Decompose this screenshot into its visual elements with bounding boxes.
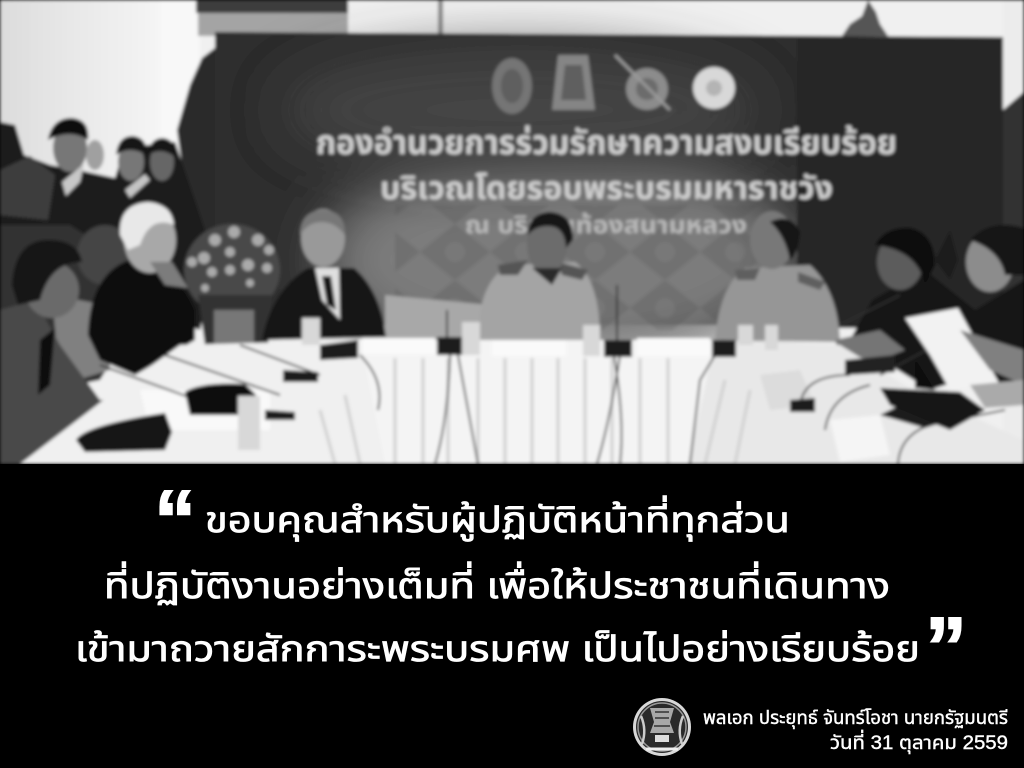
standing people, back left: [0, 118, 215, 330]
banner heading: [316, 124, 897, 239]
microphones and cables: [100, 285, 1005, 464]
icon: government seal: [633, 698, 691, 756]
banner backdrop: [215, 32, 1003, 370]
quote text: [75, 495, 920, 669]
banner heading: กองอำนวยการร่วมรักษาความสงบเรียบร้อย: [316, 124, 897, 162]
quote text: ขอบคุณสำหรับผู้ปฏิบัติหน้าที่ทุกส่วน: [205, 495, 790, 541]
right-side guests: [835, 225, 1024, 390]
left-side seated guests: [0, 202, 195, 464]
banner emblems: [492, 55, 735, 114]
tent background: [0, 0, 1024, 464]
opening quotation mark: “: [154, 473, 196, 567]
quote text: เข้ามาถวายสักการะพระบรมศพ เป็นไปอย่างเรียบร้อย: [75, 628, 920, 669]
attribution: พลเอก ประยุทธ์ จันทร์โอชา นายกรัฐมนตรี: [703, 708, 1008, 729]
officer foreground: [0, 300, 178, 464]
photo: meeting in front of banner: [0, 0, 1024, 464]
general, right of centre: [715, 211, 840, 342]
flower arrangement: [184, 224, 280, 346]
closing quotation mark: ”: [925, 600, 967, 694]
caption band: [0, 464, 1024, 768]
attribution: [703, 708, 1008, 754]
quote text: ที่ปฏิบัติงานอย่างเต็มที่ เพื่อให้ประชาชนที่เดินทาง: [104, 561, 890, 606]
banner heading: บริเวณโดยรอบพระบรมมหาราชวัง: [380, 170, 833, 206]
man in suit left of centre: [262, 209, 386, 340]
attribution: วันที่ 31 ตุลาคม 2559: [830, 729, 1008, 754]
conference table with white cloth: [20, 338, 1024, 464]
table bases, hats and bottles: [76, 308, 1024, 452]
white papers, right: [905, 308, 1000, 390]
banner heading: ณ บริเวณท้องสนามหลวง: [465, 211, 747, 239]
prime minister, centre: [478, 212, 600, 340]
white-haired guest: [88, 258, 195, 375]
